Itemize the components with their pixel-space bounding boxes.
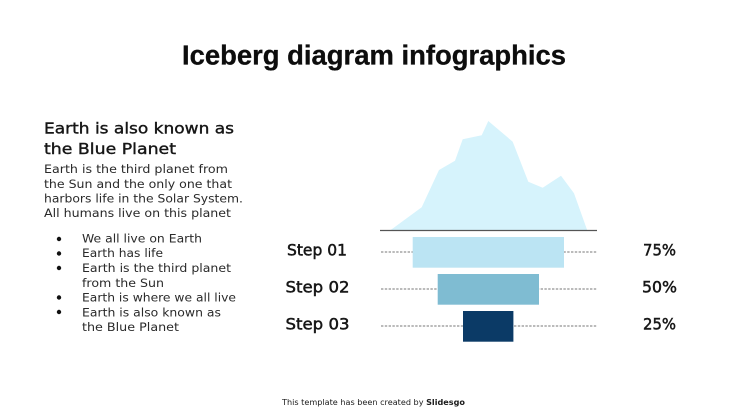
value: 75%: 75% (643, 240, 676, 260)
paragraph: Earth description: Earth is the third planet from (44, 162, 228, 176)
label: step 03: Step 03 (286, 314, 350, 334)
heading: Blue Planet (44, 120, 234, 158)
bullet list: the Blue Planet (82, 320, 179, 334)
paragraph: Earth description: the Sun and the only one that (44, 177, 232, 191)
footer credit: This template has been created by Slidesgo (281, 398, 465, 407)
bullet list: Earth is where we all live (82, 290, 236, 304)
bullet list: from the Sun (82, 276, 164, 290)
bullet list: Earth has life (82, 246, 163, 260)
paragraph: Earth description: harbors life in the Solar System. (44, 192, 243, 206)
waterline (380, 230, 597, 232)
bullet list: Earth is also known as (82, 306, 221, 320)
iceberg tip above water (390, 121, 587, 230)
title: Iceberg diagram infographics (182, 40, 566, 70)
bar: step 01 (413, 237, 564, 268)
value: 50%: 50% (642, 278, 677, 296)
paragraph: Earth description: All humans live on this planet (44, 206, 231, 220)
label: step 02: Step 02 (286, 278, 350, 296)
paragraph: Earth description (44, 162, 243, 220)
text block: Earth intro (44, 120, 243, 220)
bullet list (57, 232, 236, 334)
heading: Blue Planet: the Blue Planet (44, 140, 176, 158)
bullet list: We all live on Earth (82, 232, 202, 246)
label: step 01: Step 01 (287, 240, 347, 260)
bar: step 03 (463, 311, 513, 342)
value: 25%: 25% (643, 314, 676, 334)
heading: Blue Planet: Earth is also known as (44, 120, 234, 138)
bullet list: Earth is the third planet (82, 261, 231, 275)
bar: step 02 (438, 274, 539, 305)
